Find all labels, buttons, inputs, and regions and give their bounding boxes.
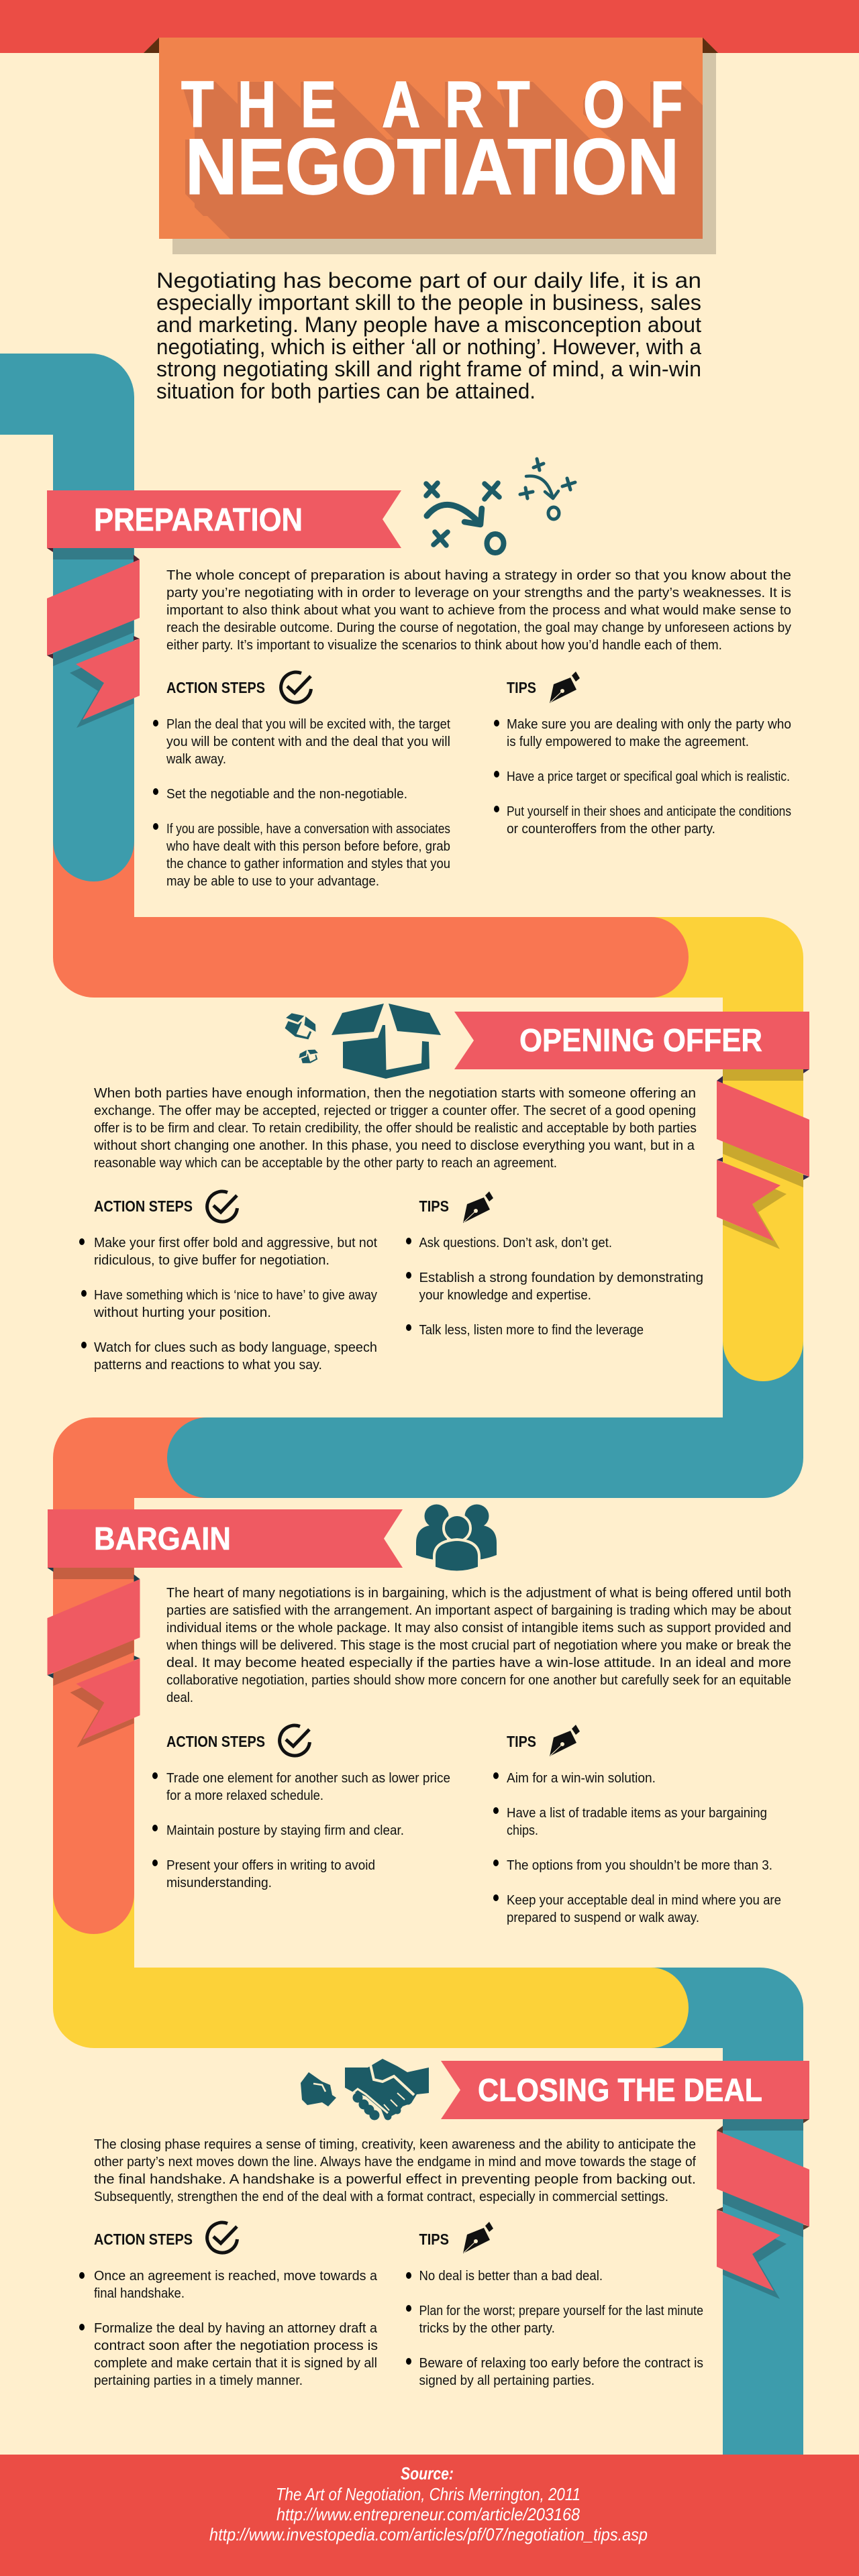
intro text: situation for both parties can be attained. (156, 379, 536, 403)
footer: sources: Source: (401, 2463, 454, 2483)
action steps list: you will be content with and the deal that you will (166, 735, 450, 749)
tips list (406, 1236, 703, 1338)
action steps list (152, 1771, 450, 1890)
body text: exchange. The offer may be accepted, rejected or trigger a counter offer. The secret of a good opening (94, 1104, 696, 1118)
body text: either party. It’s important to visualize the scenarios to think about how you’d handle each of them. (166, 638, 722, 653)
action steps list: patterns and reactions to what you say. (94, 1358, 322, 1373)
tips list (493, 1771, 781, 1925)
ribbon: opening offer: OPENING OFFER (519, 1023, 762, 1059)
action steps list: complete and make certain that it is signed by all (94, 2356, 377, 2371)
body text: deal. It may become heated especially if the parties have a win-lose attitude. In an ideal and more (166, 1656, 791, 1670)
icon: pen (463, 2222, 493, 2253)
tips list: Keep your acceptable deal in mind where you are (507, 1893, 781, 1908)
body text: reach the desirable outcome. During the course of negotation, the goal may change by unforeseen actions by (166, 621, 791, 635)
tips heading: TIPS (507, 679, 536, 696)
action steps list: Set the negotiable and the non-negotiable. (166, 787, 407, 802)
tips list: tricks by the other party. (419, 2321, 555, 2336)
icon: pen (550, 1725, 580, 1756)
tips list: Aim for a win-win solution. (507, 1771, 656, 1786)
icon: check (207, 1191, 238, 1222)
intro text: Negotiating has become part of our daily life, it is an (156, 268, 701, 292)
tips list: or counteroffers from the other party. (507, 822, 715, 837)
body text (93, 1086, 697, 1171)
action steps list (79, 1236, 377, 1373)
tips list: is fully empowered to make the agreement. (507, 735, 749, 749)
action steps list: Once an agreement is reached, move towards a (94, 2269, 378, 2284)
action steps list: Formalize the deal by having an attorney draft a (94, 2321, 378, 2336)
tips list: Plan for the worst; prepare yourself for the last minute (419, 2304, 703, 2318)
action steps list: walk away. (166, 752, 226, 767)
body text: collaborative negotiation, parties should show more concern for one another but carefully seek for an equitable (166, 1673, 791, 1688)
body text: Subsequently, strengthen the end of the deal with a format contract, especially in commercial settings. (94, 2190, 668, 2204)
action steps heading: ACTION STEPS (94, 1197, 193, 1215)
body text (94, 2137, 696, 2204)
action steps list: Watch for clues such as body language, speech (94, 1340, 377, 1355)
intro text (156, 268, 701, 403)
ribbon: preparation: PREPARATION (94, 502, 303, 538)
body text: important to also think about what you want to achieve from the process and what would make sense to (166, 603, 791, 618)
ribbon: opening offer (454, 1012, 809, 1249)
icon: pen (463, 1191, 493, 1223)
action steps list: pertaining parties in a timely manner. (94, 2373, 303, 2388)
body text (166, 568, 791, 653)
body text: other party’s next moves down the line. Always have the endgame in mind and move towards the stage of (94, 2155, 696, 2169)
ribbon: bargain (47, 1509, 403, 1748)
action steps list: misunderstanding. (166, 1876, 272, 1890)
tips list: Ask questions. Don’t ask, don’t get. (419, 1236, 612, 1250)
action steps list (153, 717, 450, 889)
tips list: The options from you shouldn’t be more than 3. (507, 1858, 772, 1873)
body text: The whole concept of preparation is about having a strategy in order so that you know about the (166, 568, 791, 583)
action steps list: the chance to gather information and styles that you (166, 857, 450, 871)
body text: party you’re negotiating with in order to leverage on your strengths and the party’s weaknesses. It is (166, 586, 791, 600)
action steps list: Trade one element for another such as lower price (166, 1771, 450, 1786)
action steps list: who have dealt with this person before before, grab (166, 839, 450, 854)
icon: handshake (345, 2059, 429, 2120)
tips list: Have a price target or specifical goal which is realistic. (507, 769, 790, 784)
body text: parties are satisfied with the arrangement. An important aspect of bargaining is trading which may be about (166, 1603, 791, 1618)
tips list: your knowledge and expertise. (419, 1288, 591, 1303)
body text (166, 1586, 791, 1705)
tips list: signed by all pertaining parties. (419, 2373, 595, 2388)
footer: sources: http://www.entrepreneur.com/article/203168 (276, 2504, 580, 2524)
action steps list (79, 2269, 378, 2388)
intro text: and marketing. Many people have a misconception about (156, 313, 701, 337)
icon: pen (550, 672, 580, 703)
icon: check (207, 2222, 238, 2253)
action steps heading: ACTION STEPS (166, 679, 265, 696)
body text: the final handshake. A handshake is a powerful effect in preventing people from backing out. (94, 2172, 696, 2187)
icon: open box (281, 1004, 441, 1079)
intro text: strong negotiating skill and right frame of mind, a win-win (156, 357, 701, 381)
action steps list: If you are possible, have a conversation with associates (166, 822, 450, 837)
action steps list: may be able to use to your advantage. (166, 874, 379, 889)
body text: deal. (166, 1690, 193, 1705)
tips list: Make sure you are dealing with only the party who (507, 717, 791, 732)
action steps list: ridiculous, to give buffer for negotiation. (94, 1253, 330, 1268)
intro text: especially important skill to the people in business, sales (156, 290, 701, 315)
tips list: prepared to suspend or walk away. (507, 1911, 699, 1925)
body text: The heart of many negotiations is in bargaining, which is the adjustment of what is being offered until both (166, 1586, 791, 1601)
body text: When both parties have enough information, then the negotiation starts with someone offering an (94, 1086, 696, 1101)
tips list: No deal is better than a bad deal. (419, 2269, 603, 2284)
tips list (494, 717, 791, 837)
action steps list: final handshake. (94, 2286, 185, 2301)
tips list: chips. (507, 1823, 538, 1838)
tips heading: TIPS (507, 1733, 536, 1750)
ribbon: closing the deal: CLOSING THE DEAL (478, 2073, 762, 2108)
action steps list: Plan the deal that you will be excited with, the target (166, 717, 450, 732)
tips list: Talk less, listen more to find the leverage (419, 1323, 644, 1338)
body text: without short changing one another. In this phase, you need to disclose everything you want, but in a (93, 1138, 695, 1153)
body text: when things will be delivered. This stage is the most crucial part of negotiation where you make or break the (166, 1638, 791, 1653)
footer: sources (0, 2455, 859, 2576)
body text: The closing phase requires a sense of timing, creativity, keen awareness and the ability to anticipate the (94, 2137, 696, 2152)
footer: sources: The Art of Negotiation, Chris Merrington, 2011 (276, 2484, 580, 2504)
title block (144, 38, 718, 254)
tips list: Have a list of tradable items as your bargaining (507, 1806, 767, 1821)
tips list: Beware of relaxing too early before the contract is (419, 2356, 703, 2371)
icon: people (416, 1504, 497, 1572)
title block: NEGOTIATION (185, 123, 679, 211)
tips list (406, 2269, 703, 2388)
footer: sources: http://www.investopedia.com/articles/pf/07/negotiation_tips.asp (209, 2524, 648, 2544)
body text: offer is to be firm and clear. To retain credibility, the offer should be realistic and acceptable by both parties (94, 1121, 697, 1136)
icon: check (281, 672, 311, 702)
title block: THE ART OF (181, 68, 683, 141)
winding ribbon path (0, 354, 803, 2455)
tips heading: TIPS (419, 1197, 449, 1215)
action steps list: for a more relaxed schedule. (166, 1788, 323, 1803)
action steps list: Maintain posture by staying firm and clear. (166, 1823, 404, 1838)
tips list: Put yourself in their shoes and anticipate the conditions (507, 804, 791, 819)
icon: check (280, 1725, 310, 1756)
tips list: Establish a strong foundation by demonstrating (419, 1271, 703, 1285)
panel: bargain (47, 1504, 791, 1925)
action steps heading: ACTION STEPS (166, 1733, 265, 1750)
body text: reasonable way which can be acceptable by the other party to reach an agreement. (94, 1156, 557, 1171)
body text: individual items or the whole package. It may also consist of intangible items such as support provided and (166, 1621, 791, 1635)
ribbon: bargain: BARGAIN (94, 1521, 231, 1557)
ribbon: preparation (47, 490, 401, 728)
action steps heading: ACTION STEPS (94, 2231, 193, 2248)
icon: game plan (426, 459, 575, 553)
panel: closing the deal (79, 2059, 809, 2388)
panel: opening offer (79, 1004, 809, 1373)
action steps list: Have something which is ‘nice to have’ to give away (94, 1288, 377, 1303)
panel: preparation (47, 459, 791, 889)
top band (0, 0, 859, 53)
tips heading: TIPS (419, 2231, 449, 2248)
action steps list: contract soon after the negotiation process is (94, 2339, 378, 2353)
intro text: negotiating, which is either ‘all or nothing’. However, with a (156, 335, 701, 359)
action steps list: Make your first offer bold and aggressive, but not (94, 1236, 377, 1250)
icon: small handshake (301, 2072, 336, 2106)
action steps list: without hurting your position. (93, 1305, 271, 1320)
action steps list: Present your offers in writing to avoid (166, 1858, 375, 1873)
ribbon: closing the deal (441, 2061, 809, 2299)
